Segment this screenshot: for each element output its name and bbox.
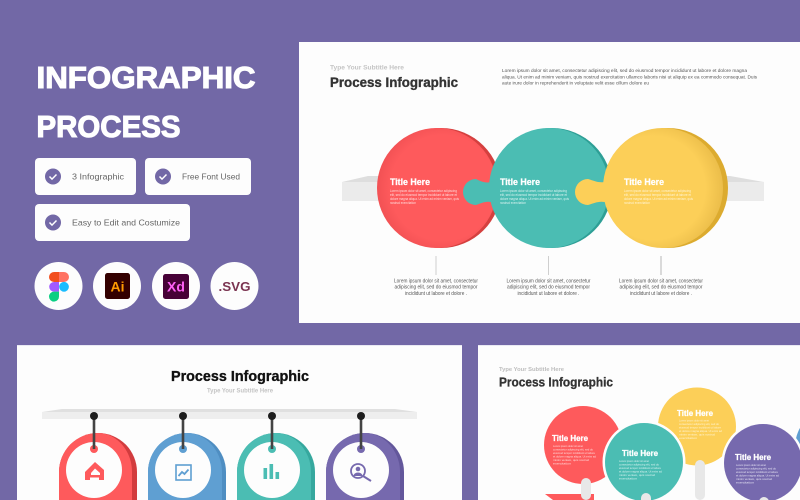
- teal text: elit, sed do eiusmod tempor incididunt ut labore et: [500, 193, 567, 197]
- teal balloon: [602, 420, 686, 500]
- purple balloon: [722, 422, 800, 500]
- icon: Figma: [34, 262, 82, 310]
- yellow title: Title Here: [677, 409, 714, 418]
- description text: aliqua. Ut enim ad minim veniam, quis nostrud exercitation ullamco laboris nisi ut aliquip ex ea commodo consequat. Duis: [502, 74, 758, 80]
- shelf: [42, 409, 417, 419]
- red text: Lorem ipsum dolor sit amet, consectetur adipiscing: [390, 189, 457, 193]
- icon: SVG: [210, 262, 258, 310]
- icon: chart frame: [176, 465, 191, 480]
- icon: magnifier: [351, 464, 371, 481]
- right shelf: [720, 176, 764, 201]
- caption 3: adipiscing elit, sed do eiusmod tempor: [620, 285, 703, 291]
- purple text: et dolore magna aliqua. Ut enim ad: [736, 474, 779, 478]
- caption 1: [394, 256, 478, 297]
- purple text: eiusmod tempor incididunt ut labore: [736, 470, 778, 474]
- teal text: nostrud exercitation: [500, 201, 526, 205]
- yellow text: exercitation: [679, 436, 697, 440]
- red text: dolore magna aliqua. Ut enim ad minim veniam, quis: [390, 197, 459, 201]
- badge: Free Font Used: [145, 158, 251, 195]
- teal circle with puzzle knob: [463, 128, 612, 248]
- icon: Adobe XD: [152, 262, 200, 310]
- red lines: eiusmod tempor incididunt ut labore: [553, 451, 595, 455]
- heading: Process Infographic: [499, 376, 613, 390]
- teal text: dolore magna aliqua. Ut enim ad minim veniam, quis: [500, 197, 569, 201]
- main title: [36, 60, 255, 144]
- red flag: [545, 494, 594, 500]
- panel: hanging tags slide: [17, 345, 462, 500]
- description text: Lorem ipsum dolor sit amet, consectetur adipiscing elit, sed do eiusmod tempor incididunt ut labore et dolore magna: [502, 68, 747, 74]
- red text: [390, 189, 459, 205]
- panel: puzzle circles slide: [299, 42, 800, 323]
- subtitle: Type Your Subtitle Here: [499, 367, 565, 373]
- subtitle: Type Your Subtitle Here: [330, 64, 404, 72]
- yellow text: elit, sed do eiusmod tempor incididunt ut labore et: [624, 193, 691, 197]
- panel: balloon circles slide: [478, 345, 800, 500]
- hanging pin: [268, 412, 276, 449]
- blue tag: [148, 412, 226, 500]
- yellow text: dolore magna aliqua. Ut enim ad minim veniam, quis: [624, 197, 693, 201]
- purple tag: [326, 412, 404, 500]
- purple text: Lorem ipsum dolor sit amet: [736, 463, 766, 467]
- caption 1: adipiscing elit, sed do eiusmod tempor: [394, 285, 478, 291]
- teal tag: [237, 412, 315, 500]
- teal text: [500, 189, 569, 205]
- teal text: consectetur adipiscing elit, sed do: [619, 462, 659, 466]
- purple text: minim veniam, quis nostrud: [736, 477, 772, 481]
- yellow title: Title Here: [624, 177, 664, 187]
- teal text: Lorem ipsum dolor sit amet: [619, 459, 649, 463]
- caption 1: incididunt ut labore et dolore .: [405, 291, 467, 297]
- teal text: minim veniam, quis nostrud: [619, 473, 655, 477]
- red text: nostrud exercitation: [390, 201, 416, 205]
- caption 2: incididunt ut labore et dolore .: [518, 291, 580, 297]
- red lines: et dolore magna aliqua. Ut enim ad: [553, 454, 596, 458]
- teal title: Title Here: [500, 177, 540, 187]
- icon: Adobe Illustrator: [93, 262, 141, 310]
- purple text: exercitation: [736, 480, 754, 484]
- purple text: [736, 463, 779, 484]
- caption 3: incididunt ut labore et dolore .: [630, 291, 692, 297]
- caption 2: Lorem ipsum dolor sit amet, consectetur: [506, 278, 591, 284]
- icon: bars: [264, 464, 279, 479]
- yellow text: nostrud exercitation: [624, 201, 650, 205]
- red text: elit, sed do eiusmod tempor incididunt ut labore et: [390, 193, 457, 197]
- subtitle: Type Your Subtitle Here: [207, 388, 274, 394]
- red tag: [59, 412, 137, 500]
- yellow circle with puzzle knob: [575, 128, 728, 248]
- caption 3: [619, 256, 703, 297]
- red title: Title Here: [552, 434, 589, 443]
- caption 1: Lorem ipsum dolor sit amet, consectetur: [394, 278, 478, 284]
- icon: SVG: .SVG: [218, 280, 250, 294]
- yellow text: eiusmod tempor incididunt ut labore: [679, 426, 721, 430]
- hanging pin: [179, 412, 187, 449]
- badge: 3 Infographic: 3 Infographic: [72, 172, 125, 182]
- yellow text: minim veniam, quis nostrud: [679, 432, 715, 436]
- red balloon: [544, 406, 622, 500]
- description text: aute irure dolor in reprehenderit in voluptate velit esse cillum dolore eu: [502, 80, 649, 86]
- caption 2: [506, 256, 591, 297]
- red title: Title Here: [390, 177, 430, 187]
- icon: house: [85, 462, 104, 480]
- yellow text: [624, 189, 693, 205]
- red circle: [377, 128, 501, 248]
- badge: Free Font Used: Free Font Used: [182, 172, 240, 182]
- caption 3: Lorem ipsum dolor sit amet, consectetur: [619, 278, 703, 284]
- heading: Process Infographic: [330, 74, 458, 90]
- heading: Process Infographic: [171, 368, 309, 385]
- red balloon text: [552, 434, 596, 466]
- yellow text: Lorem ipsum dolor sit amet, consectetur adipiscing: [624, 189, 691, 193]
- badge: Easy to Edit and Costumize: Easy to Edit and Costumize: [72, 218, 180, 228]
- hero panel: title, features and tools: [34, 60, 258, 310]
- badge: 3 Infographic: [35, 158, 136, 195]
- red lines: exercitation: [553, 462, 571, 466]
- red lines: consectetur adipiscing elit, sed do: [553, 448, 593, 452]
- teal text: [619, 459, 662, 480]
- main title: PROCESS: [36, 109, 180, 144]
- description text: [502, 68, 758, 86]
- yellow text: et dolore magna aliqua. Ut enim ad: [679, 429, 722, 433]
- red lines: minim veniam, quis nostrud: [553, 458, 589, 462]
- teal text: exercitation: [619, 476, 637, 480]
- red lines: [553, 444, 596, 466]
- icon: Adobe Illustrator: Ai: [110, 278, 124, 294]
- yellow text: Lorem ipsum dolor sit amet: [679, 418, 709, 422]
- teal text: Lorem ipsum dolor sit amet, consectetur adipiscing: [500, 189, 567, 193]
- left shelf: [342, 176, 385, 201]
- yellow balloon: [658, 388, 736, 500]
- hanging pin: [357, 412, 365, 449]
- teal text: eiusmod tempor incididunt ut labore: [619, 466, 661, 470]
- hanging pin: [90, 412, 98, 449]
- blue balloon: [792, 406, 800, 488]
- purple text: consectetur adipiscing elit, sed do: [736, 466, 776, 470]
- yellow text: [679, 418, 722, 440]
- purple title: Title Here: [735, 453, 772, 462]
- icon: Adobe XD: Xd: [167, 278, 185, 294]
- teal title: Title Here: [622, 449, 659, 458]
- teal text: et dolore magna aliqua. Ut enim ad: [619, 470, 662, 474]
- main title: INFOGRAPHIC: [36, 60, 255, 95]
- caption 2: adipiscing elit, sed do eiusmod tempor: [507, 285, 590, 291]
- red lines: Lorem ipsum dolor sit amet: [553, 444, 583, 448]
- badge: Easy to Edit and Costumize: [35, 204, 190, 241]
- yellow text: consectetur adipiscing elit, sed do: [679, 422, 719, 426]
